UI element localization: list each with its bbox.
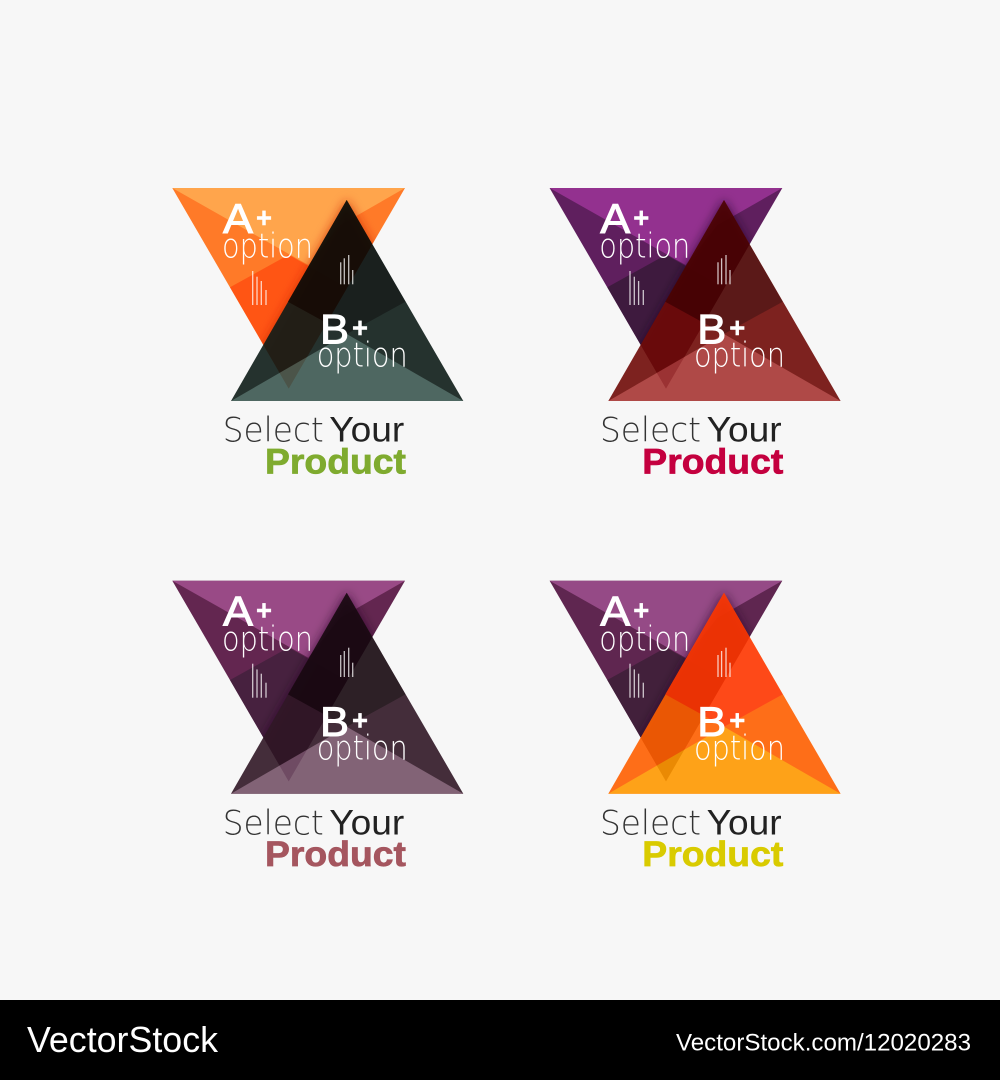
image url: VectorStock.com/12020283 bbox=[676, 1030, 971, 1056]
label A+ option: A bbox=[223, 195, 253, 242]
caption: Select Your Product bbox=[223, 411, 406, 481]
label B+ option: option bbox=[694, 728, 785, 768]
upright triangle B bbox=[608, 593, 841, 794]
label A+ option: option bbox=[599, 619, 690, 659]
caption: Select Your Product: Product bbox=[265, 442, 406, 481]
caption: Select Your Product: Select bbox=[600, 803, 701, 843]
label B+ option: + bbox=[729, 705, 745, 736]
label B+ option: + bbox=[729, 312, 745, 343]
inverted triangle A bbox=[550, 188, 782, 388]
label B+ option: B bbox=[320, 305, 349, 352]
upright triangle B bbox=[231, 593, 463, 794]
icon: bars B bbox=[341, 648, 353, 677]
label A+ option: A bbox=[600, 195, 630, 242]
label A+ option bbox=[599, 195, 690, 267]
caption: Select Your Product: Your bbox=[329, 411, 405, 450]
label B+ option bbox=[317, 305, 408, 376]
brand name: VectorStock bbox=[27, 1019, 219, 1060]
upright triangle B bbox=[231, 200, 463, 401]
icon: bars A bbox=[630, 664, 643, 698]
caption: Select Your Product: Your bbox=[707, 803, 782, 842]
icon: bars B bbox=[341, 255, 353, 284]
caption: Select Your Product: Your bbox=[329, 803, 405, 842]
panel: purple and maroon option graphic bbox=[550, 188, 841, 481]
caption: Select Your Product: Select bbox=[223, 411, 324, 451]
label A+ option: + bbox=[256, 202, 272, 233]
panel: plum and orange option graphic bbox=[550, 581, 841, 874]
icon: bars A bbox=[253, 271, 266, 305]
label A+ option: A bbox=[600, 588, 630, 635]
label B+ option: B bbox=[320, 698, 349, 745]
icon: bars A bbox=[630, 271, 643, 305]
label A+ option bbox=[599, 588, 690, 659]
label A+ option: option bbox=[222, 619, 313, 659]
label B+ option: option bbox=[317, 336, 408, 376]
label A+ option: + bbox=[256, 595, 272, 626]
inverted triangle A bbox=[550, 580, 782, 781]
label B+ option: + bbox=[352, 312, 368, 343]
panel: orange and slate option graphic bbox=[172, 188, 463, 481]
label B+ option bbox=[317, 698, 408, 768]
panel: plum and mauve option graphic bbox=[172, 581, 463, 874]
label A+ option: A bbox=[223, 588, 253, 635]
icon: bars B bbox=[718, 648, 730, 677]
inverted triangle A bbox=[172, 580, 405, 781]
caption: Select Your Product: Select bbox=[600, 411, 701, 451]
label B+ option: option bbox=[694, 336, 785, 376]
caption: Select Your Product: Your bbox=[707, 411, 782, 450]
label B+ option: B bbox=[697, 698, 726, 745]
caption: Select Your Product bbox=[223, 803, 406, 874]
caption: Select Your Product bbox=[600, 411, 784, 481]
label A+ option: option bbox=[599, 227, 690, 267]
label B+ option bbox=[694, 698, 785, 768]
label B+ option: B bbox=[697, 305, 726, 352]
watermark footer bar bbox=[0, 1000, 1000, 1080]
label A+ option: + bbox=[633, 595, 649, 626]
label B+ option: + bbox=[352, 705, 368, 736]
icon: bars A bbox=[253, 664, 266, 698]
label A+ option: + bbox=[633, 202, 649, 233]
label B+ option bbox=[694, 305, 785, 376]
inverted triangle A bbox=[172, 188, 405, 388]
label B+ option: option bbox=[317, 728, 408, 768]
label A+ option: option bbox=[222, 227, 313, 267]
upright triangle B bbox=[608, 200, 841, 401]
caption: Select Your Product: Product bbox=[642, 442, 784, 481]
label A+ option bbox=[222, 588, 313, 659]
caption: Select Your Product: Select bbox=[223, 803, 324, 843]
caption: Select Your Product bbox=[600, 803, 784, 874]
icon: bars B bbox=[718, 255, 730, 284]
caption: Select Your Product: Product bbox=[265, 835, 406, 874]
label A+ option bbox=[222, 195, 313, 267]
caption: Select Your Product: Product bbox=[642, 835, 784, 874]
